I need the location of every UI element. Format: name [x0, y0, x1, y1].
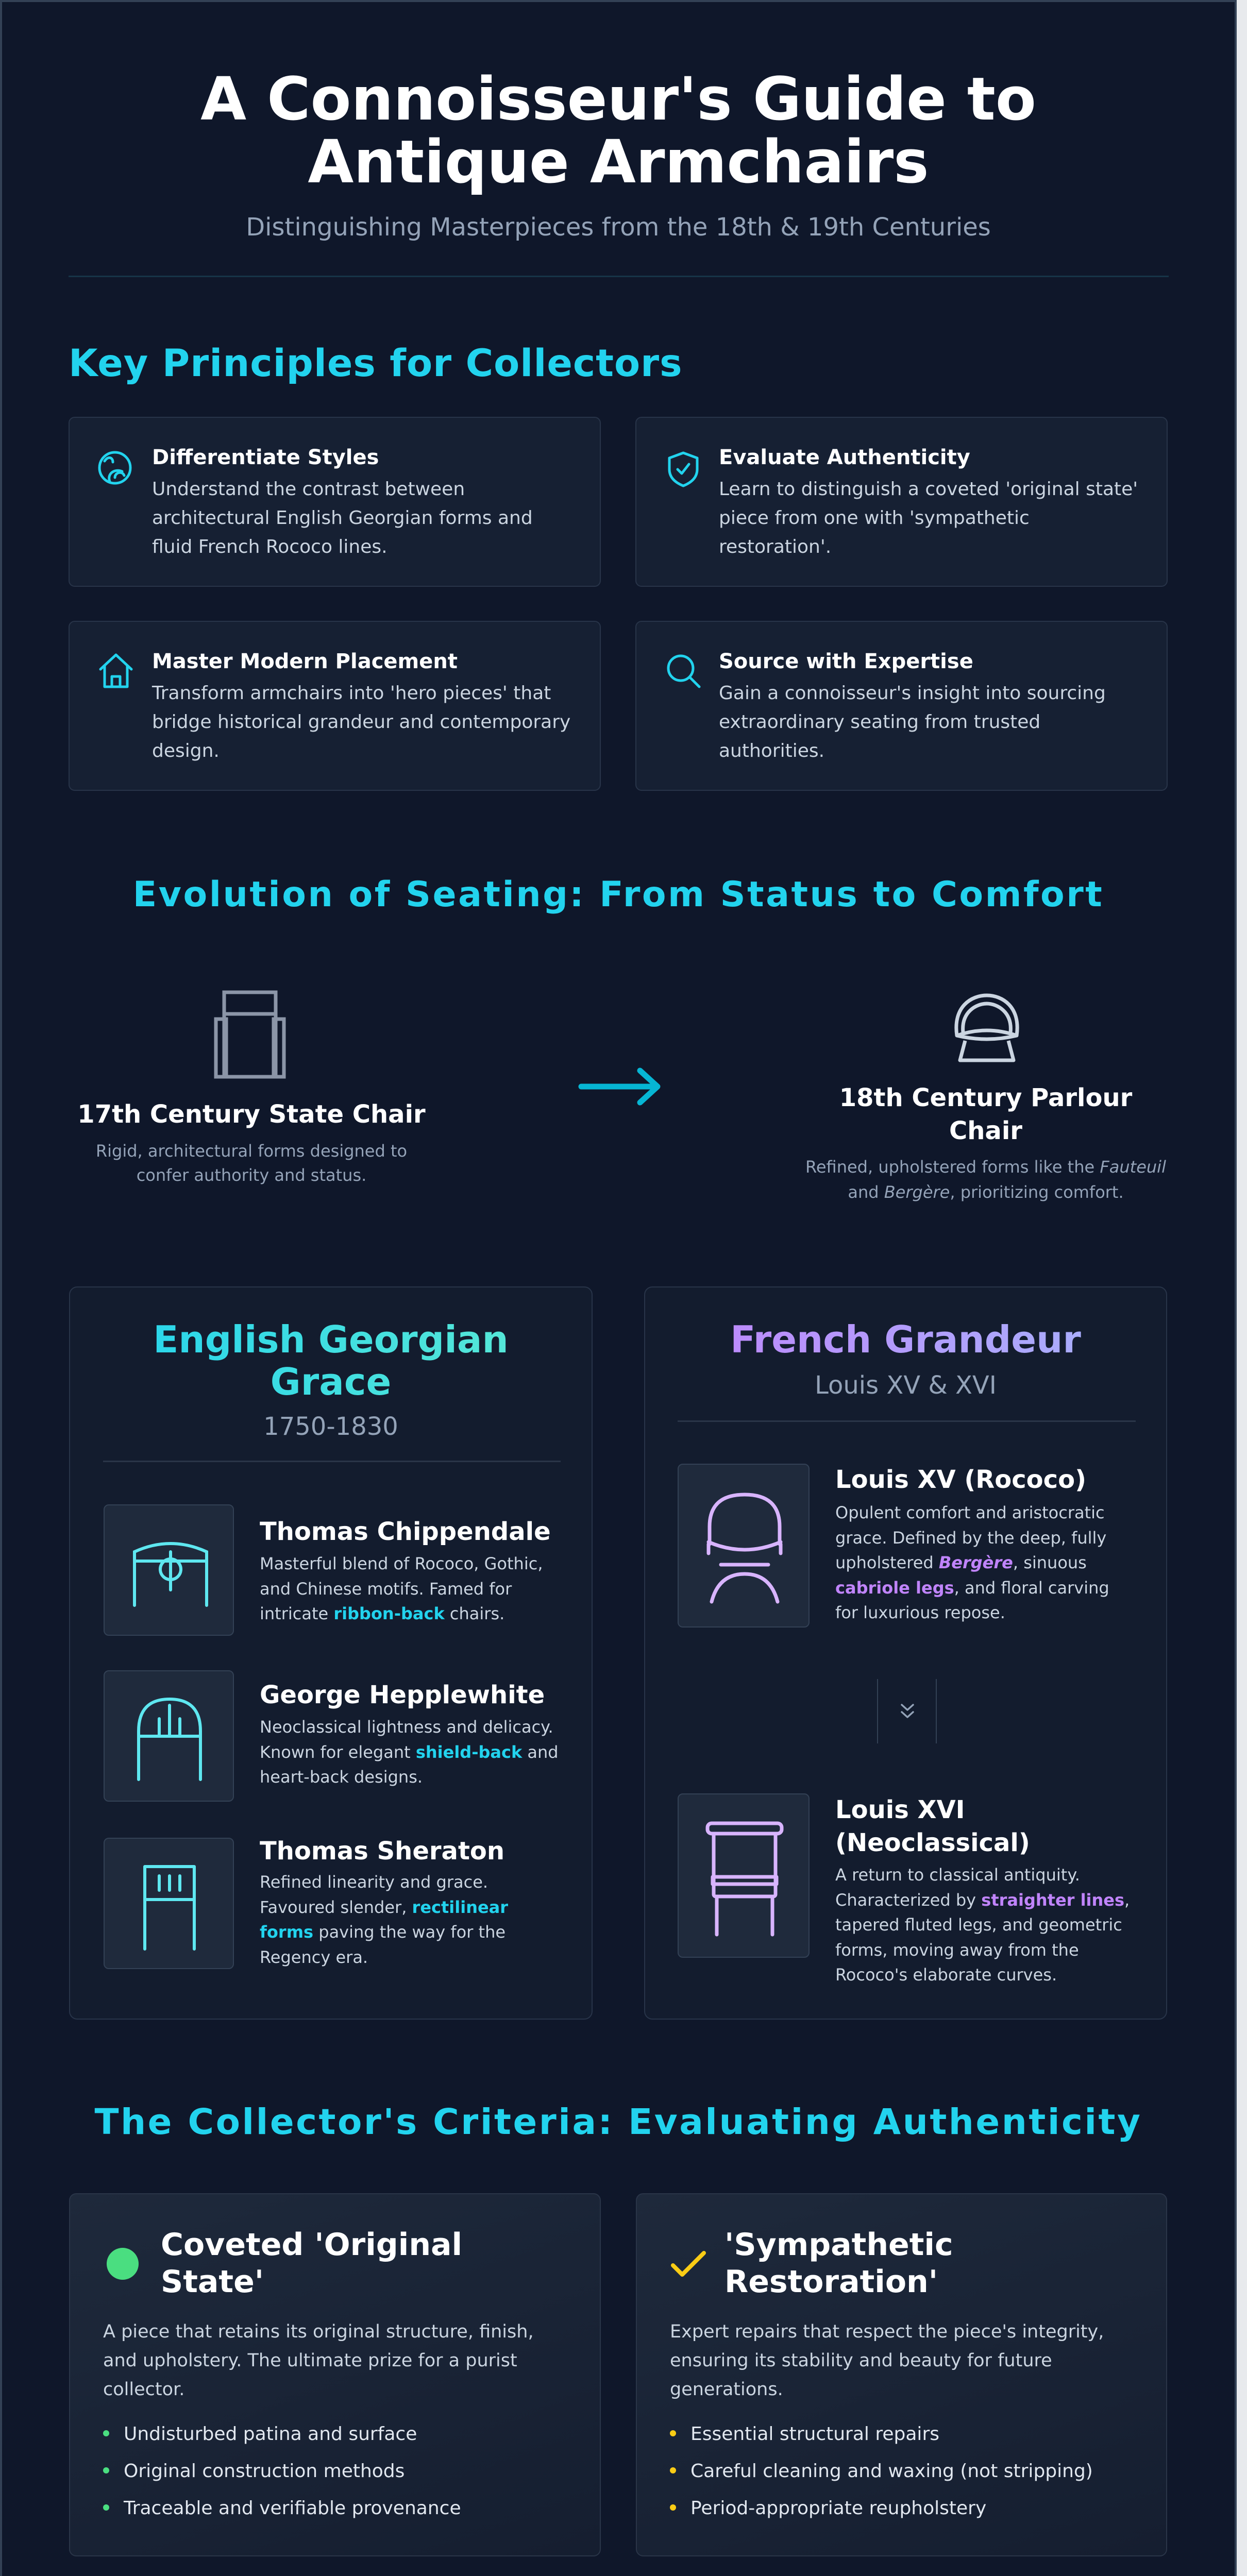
item: louis xvi: Rococo's elaborate curves.: [835, 1965, 1057, 1985]
item: louis xvi: tapered fluted legs, and geometric: [835, 1915, 1122, 1935]
item: hepplewhite: George Hepplewhite: [260, 1681, 545, 1709]
timeline: parlour chair: [805, 993, 1166, 1202]
item: sheraton: Regency era.: [260, 1947, 368, 1967]
bullet list: Careful cleaning and waxing (not stripping): [690, 2461, 1093, 2482]
item: chippendale: and Chinese motifs. Famed for: [260, 1579, 512, 1598]
arrow: [578, 1067, 661, 1106]
card: original state: Coveted 'Original: [161, 2227, 462, 2263]
card: sympathetic restoration: generations.: [670, 2379, 783, 2400]
card: master modern placement: [69, 621, 601, 791]
item: chippendale: Masterful blend of Rococo, Gothic,: [260, 1554, 543, 1573]
card: original state: collector.: [103, 2379, 184, 2400]
item: louis xvi: (Neoclassical): [835, 1828, 1030, 1857]
item: sheraton: [104, 1837, 508, 1969]
icon: neoclassical chair: [678, 1793, 810, 1958]
heading: collector's criteria: The Collector's Criteria: Evaluating Authenticity: [94, 2102, 1142, 2143]
icon: state chair: [214, 990, 285, 1079]
title: [200, 65, 1036, 197]
icon: rectilinear chair: [104, 1838, 234, 1969]
subtitle: Distinguishing Masterpieces from the 18th & 19th Centuries: [246, 213, 991, 242]
icon: magnifier: [667, 654, 701, 688]
timeline: parlour chair: and Bergère, prioritizing comfort.: [848, 1182, 1124, 1202]
icon: checkmark: [671, 2251, 706, 2277]
timeline: parlour chair: Chair: [949, 1116, 1022, 1145]
card: differentiate styles: architectural English Georgian forms and: [152, 507, 533, 529]
card: source with expertise: authorities.: [719, 740, 824, 761]
card: source with expertise: Source with Expertise: [719, 650, 973, 673]
timeline: state chair: [77, 990, 426, 1185]
timeline: parlour chair: 18th Century Parlour: [839, 1083, 1132, 1112]
card: master modern placement: bridge historical grandeur and contemporary: [152, 711, 570, 733]
bullet list: Undisturbed patina and surface: [124, 2424, 417, 2445]
heading: english georgian grace: Grace: [271, 1360, 391, 1403]
item: chippendale: intricate ribbon-back chairs.: [260, 1604, 504, 1623]
item: louis xvi: A return to classical antiquity.: [835, 1865, 1080, 1885]
bullet list: Essential structural repairs: [690, 2424, 939, 2445]
card: evaluate authenticity: piece from one with 'sympathetic: [719, 507, 1030, 529]
icon: house: [99, 653, 133, 688]
card: evaluate authenticity: Learn to distinguish a coveted 'original state': [719, 479, 1138, 500]
item: louis xvi: [678, 1793, 1130, 1985]
item: louis xv: Opulent comfort and aristocratic: [835, 1503, 1105, 1522]
card: sympathetic restoration: 'Sympathetic: [724, 2227, 953, 2263]
item: louis xvi: Louis XVI: [835, 1795, 965, 1824]
title: Antique Armchairs: [308, 128, 929, 197]
heading: english georgian grace: English Georgian: [153, 1318, 509, 1361]
card: original state: [69, 2193, 601, 2556]
card: source with expertise: extraordinary seating from trusted: [719, 711, 1040, 733]
heading: french grandeur: French Grandeur: [730, 1318, 1081, 1361]
item: louis xvi: forms, moving away from the: [835, 1940, 1079, 1960]
card: sympathetic restoration: [636, 2193, 1167, 2556]
card: differentiate styles: Differentiate Styles: [152, 446, 379, 469]
card: differentiate styles: [69, 417, 601, 587]
panel: english georgian: [69, 1286, 593, 2020]
card: sympathetic restoration: ensuring its stability and beauty for future: [670, 2350, 1052, 2371]
timeline: parlour chair: Refined, upholstered forms like the Fauteuil: [805, 1157, 1166, 1177]
bullet list: Original construction methods: [124, 2461, 405, 2482]
icon: palette: [98, 451, 132, 484]
card: evaluate authenticity: restoration'.: [719, 536, 831, 557]
item: louis xv: grace. Defined by the deep, fully: [835, 1528, 1106, 1548]
item: louis xv: [678, 1464, 1109, 1628]
item: louis xv: Louis XV (Rococo): [835, 1465, 1086, 1494]
card: original state: State': [161, 2264, 264, 2300]
card: differentiate styles: fluid French Rococo lines.: [152, 536, 387, 557]
item: louis xv: upholstered Bergère, sinuous: [835, 1553, 1087, 1572]
heading: english georgian grace: [70, 1318, 592, 1403]
heading: evolution: Evolution of Seating: From Status to Comfort: [133, 874, 1104, 915]
bullet list: [670, 2424, 1093, 2519]
item: sheraton: forms paving the way for the: [260, 1922, 505, 1942]
bullet list: Traceable and verifiable provenance: [124, 2498, 461, 2519]
heading: french grandeur: [645, 1318, 1166, 1361]
bullet list: [103, 2424, 461, 2519]
item: hepplewhite: Neoclassical lightness and delicacy.: [260, 1717, 553, 1737]
card: original state: A piece that retains its original structure, finish,: [103, 2321, 534, 2342]
panel: english georgian: 1750-1830: [263, 1412, 398, 1441]
item: chippendale: Thomas Chippendale: [260, 1517, 551, 1546]
item: louis xv: cabriole legs, and floral carving: [835, 1578, 1109, 1597]
divider with chevron: [877, 1679, 937, 1743]
bullet list: Period-appropriate reupholstery: [690, 2498, 986, 2519]
item: chippendale: [104, 1504, 551, 1636]
timeline: state chair: 17th Century State Chair: [77, 1100, 426, 1129]
item: sheraton: Favoured slender, rectilinear: [260, 1897, 508, 1917]
item: sheraton: Thomas Sheraton: [260, 1837, 504, 1866]
card: evaluate authenticity: [635, 417, 1168, 587]
item: sheraton: Refined linearity and grace.: [260, 1872, 488, 1892]
panel: french grandeur: Louis XV & XVI: [815, 1371, 997, 1400]
panel: french grandeur: [644, 1286, 1167, 2020]
item: hepplewhite: [104, 1670, 559, 1802]
icon: ribbon-back chair: [104, 1504, 234, 1636]
card: differentiate styles: Understand the contrast between: [152, 479, 465, 500]
item: louis xv: for luxurious repose.: [835, 1603, 1005, 1622]
timeline: state chair: confer authority and status.: [137, 1165, 366, 1185]
card: source with expertise: [635, 621, 1168, 791]
card: master modern placement: design.: [152, 740, 220, 761]
card: sympathetic restoration: Restoration': [724, 2264, 938, 2300]
icon: shield-back chair: [104, 1670, 234, 1802]
icon: rococo chair: [678, 1464, 810, 1628]
item: hepplewhite: Known for elegant shield-back and: [260, 1742, 559, 1762]
card: master modern placement: Master Modern Placement: [152, 650, 458, 673]
card: master modern placement: Transform armchairs into 'hero pieces' that: [152, 683, 551, 704]
card: evaluate authenticity: Evaluate Authenticity: [719, 446, 970, 469]
item: hepplewhite: heart-back designs.: [260, 1767, 423, 1787]
card: sympathetic restoration: Expert repairs that respect the piece's integrity,: [670, 2321, 1104, 2342]
icon: green dot: [107, 2248, 139, 2280]
icon: parlour chair: [954, 993, 1019, 1062]
item: louis xvi: Characterized by straighter lines,: [835, 1890, 1130, 1909]
icon: shield check: [668, 451, 699, 487]
card: source with expertise: Gain a connoisseur's insight into sourcing: [719, 683, 1106, 704]
timeline: state chair: Rigid, architectural forms designed to: [96, 1141, 407, 1161]
heading: key principles: Key Principles for Collectors: [69, 342, 683, 385]
title: A Connoisseur's Guide to: [200, 65, 1036, 134]
card: original state: and upholstery. The ultimate prize for a purist: [103, 2350, 517, 2371]
